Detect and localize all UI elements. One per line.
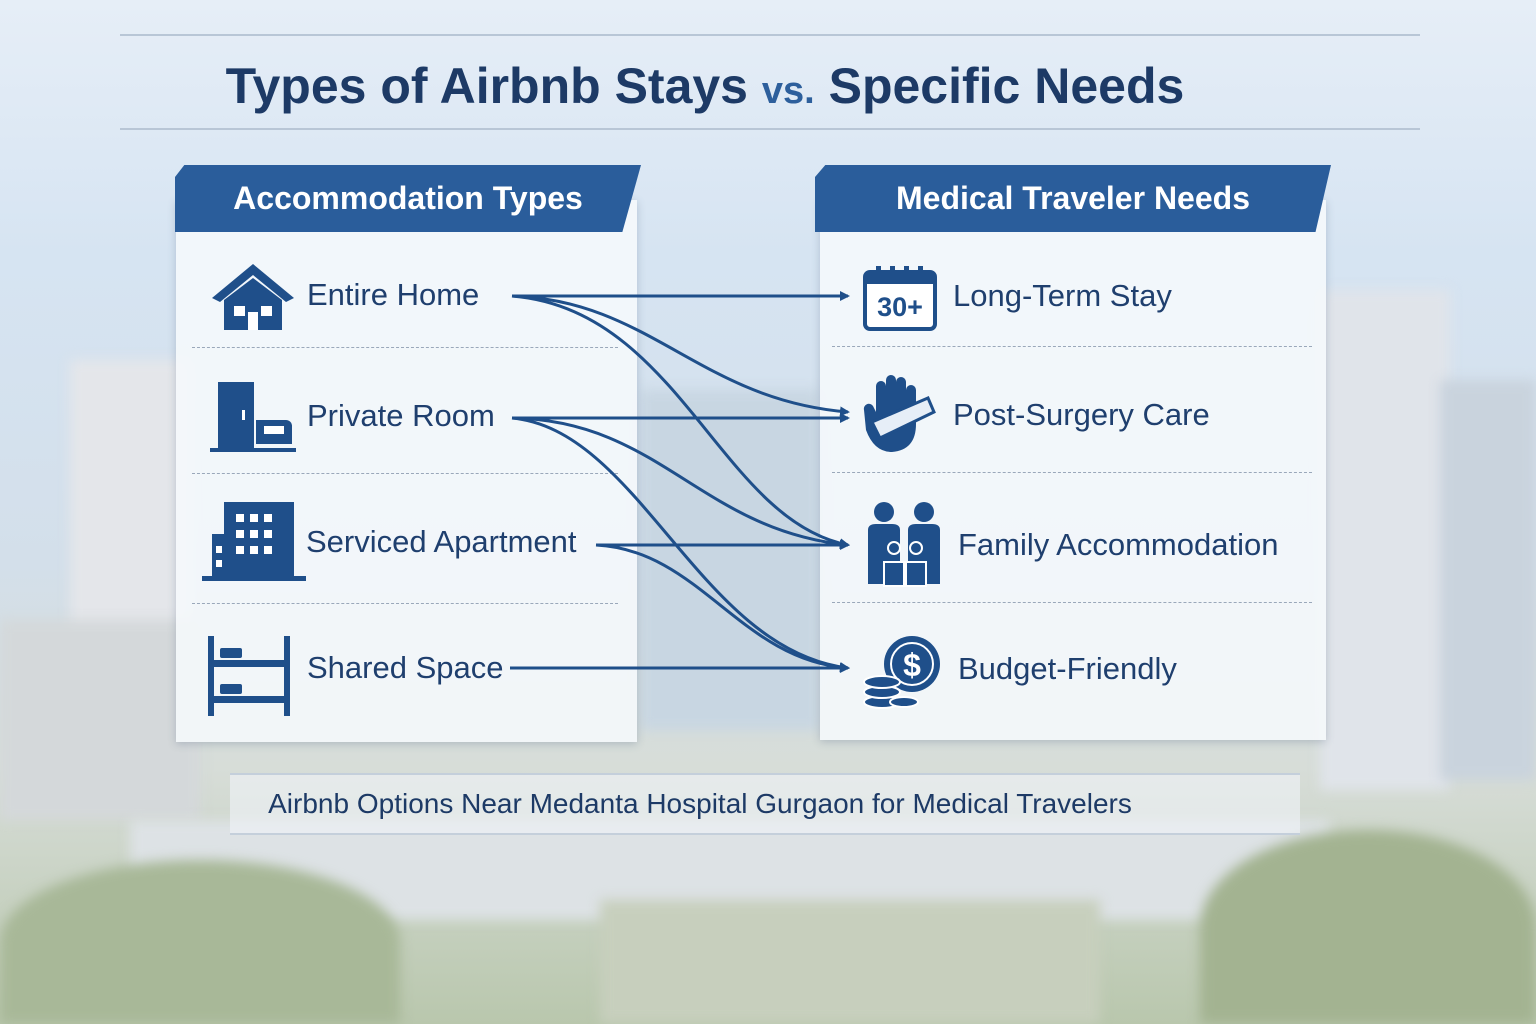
heading: medical traveler needs: Medical Traveler Needs [896,180,1250,216]
icon: coins dollar [863,636,940,709]
text: serviced apartment: Serviced Apartment [306,524,577,559]
heading: medical traveler needs [815,165,1331,232]
icon: bandaged hand [864,375,936,452]
panel: accommodation types [176,200,637,742]
icon: house [212,264,294,330]
panel: medical traveler needs [820,200,1326,740]
text: post-surgery care: Post-Surgery Care [953,397,1210,432]
footer caption: Airbnb Options Near Medanta Hospital Gurgaon for Medical Travelers [268,788,1132,819]
text: long-term stay: Long-Term Stay [953,278,1172,313]
footer caption [230,773,1300,835]
icon: door [210,382,296,452]
text: family accommodation: Family Accommodation [958,527,1278,562]
text: budget-friendly: Budget-Friendly [958,651,1177,686]
icon: family [868,502,940,587]
icon: calendar 30+ [863,266,937,331]
text: entire home: Entire Home [307,277,479,312]
title: Types of Airbnb Stays vs. Specific Needs [226,58,1184,114]
icon: bunk bed [208,636,290,716]
text: shared space: Shared Space [307,650,503,685]
heading: accommodation types: Accommodation Types [233,180,583,216]
icon: calendar 30+: 30+ [877,292,923,322]
title [120,34,1420,130]
icon: coins dollar: $ [903,647,921,683]
text: private room: Private Room [307,398,495,433]
heading: accommodation types [175,165,641,232]
icon: building [202,502,306,581]
